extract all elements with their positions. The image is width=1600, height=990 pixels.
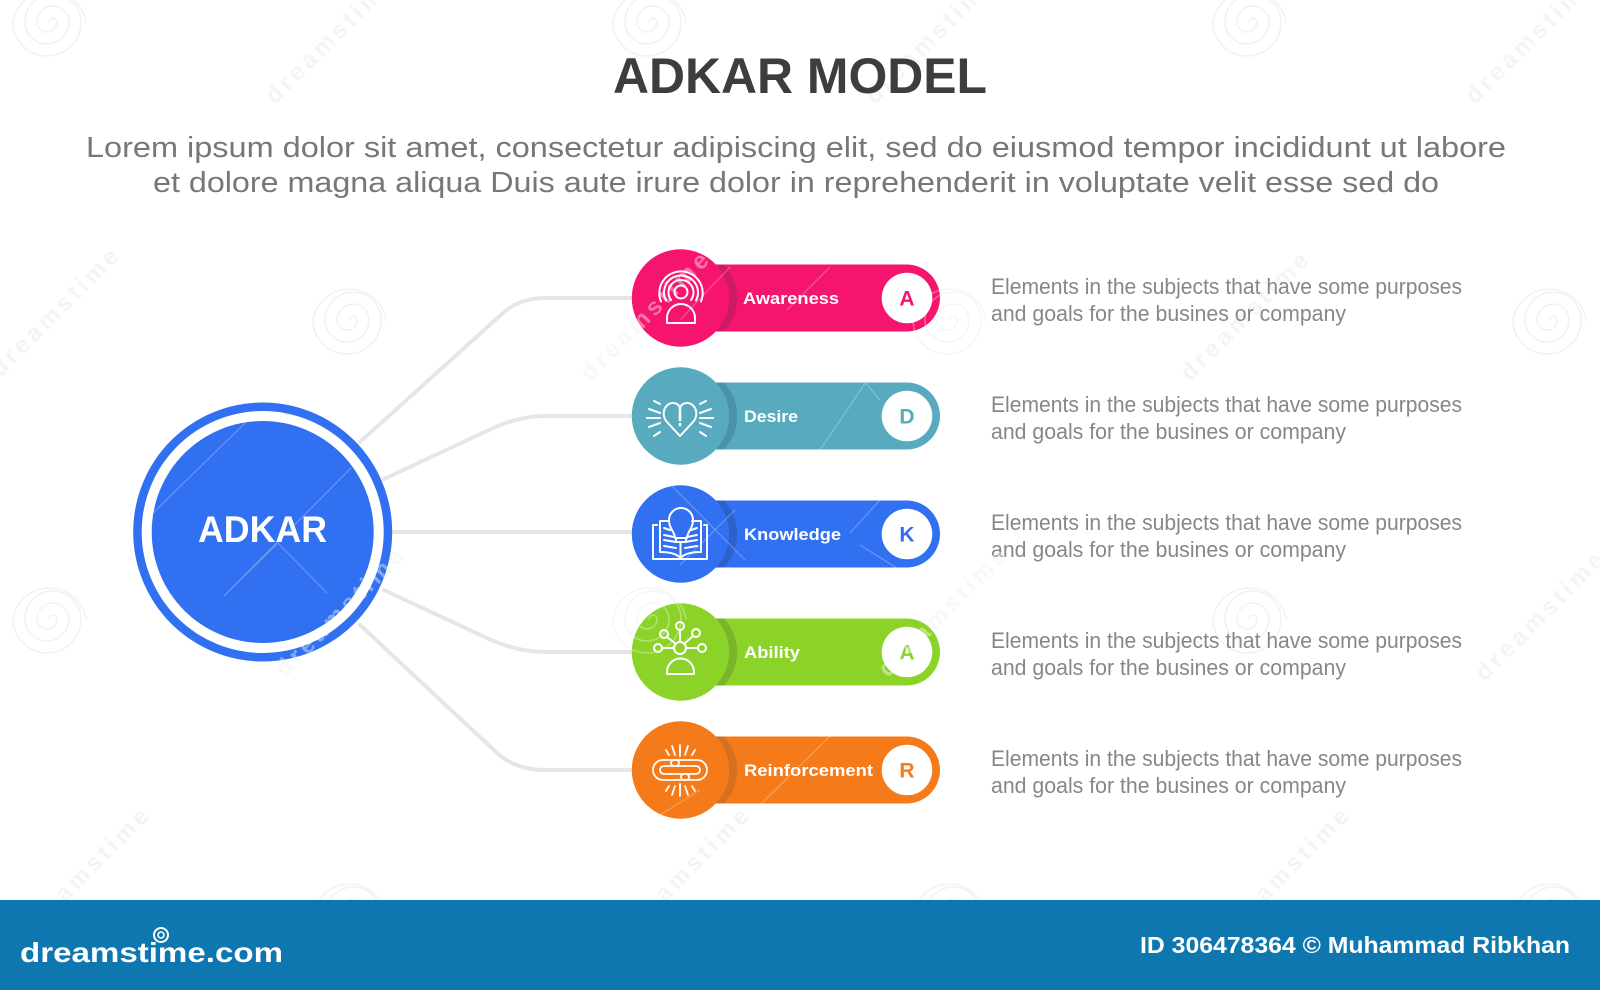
icon: book and bulb	[653, 508, 707, 559]
icon: network person	[654, 622, 706, 674]
description: Desire: and goals for the busines or company	[991, 419, 1346, 444]
watermark layer: dreamstime	[1215, 803, 1354, 942]
watermark layer: dreamstime	[873, 543, 1012, 682]
label: Knowledge: Knowledge	[744, 525, 841, 544]
badge: A	[882, 273, 932, 323]
central label: ADKAR	[198, 509, 327, 550]
watermark layer: dreamstime	[615, 803, 754, 942]
central ADKAR circle	[133, 402, 392, 662]
badge: A	[882, 627, 932, 677]
watermark layer: dreamstime	[270, 543, 409, 682]
icon: awareness	[659, 271, 703, 323]
badge: A: A	[899, 288, 915, 310]
description: Reinforcement: and goals for the busines or company	[991, 773, 1346, 798]
watermark layer: dreamstime	[15, 803, 154, 942]
title: ADKAR MODEL	[613, 48, 987, 104]
badge: R	[882, 745, 932, 795]
badge: K	[882, 509, 932, 559]
label: Ability: Ability	[744, 643, 801, 662]
description: Ability	[991, 628, 1462, 680]
icon: chain link	[653, 745, 707, 796]
watermark overlay on coloured shapes	[153, 247, 1012, 815]
badge: D	[882, 391, 932, 441]
description: Awareness: and goals for the busines or company	[991, 301, 1346, 326]
watermark layer: dreamstime	[1175, 247, 1314, 386]
description: Reinforcement	[991, 746, 1462, 798]
description: Ability: and goals for the busines or company	[991, 655, 1346, 680]
label: Desire: Desire	[744, 407, 798, 426]
footer bar	[0, 900, 1600, 990]
row: Knowledge	[632, 485, 940, 583]
subtitle: Lorem ipsum dolor sit amet, consectetur adipiscing elit, sed do eiusmod tempor incididunt ut labore	[86, 132, 1506, 164]
row: Reinforcement	[632, 721, 940, 819]
badge: R: R	[899, 760, 915, 782]
footer logo	[20, 928, 283, 968]
subtitle: et dolore magna aliqua Duis aute irure dolor in reprehenderit in voluptate velit esse sed do	[153, 167, 1439, 199]
description: Awareness	[991, 274, 1462, 326]
label: Awareness: Awareness	[743, 289, 839, 308]
description: Awareness: Elements in the subjects that have some purposes	[991, 274, 1462, 299]
icon: heart	[647, 401, 713, 436]
connector lines	[360, 298, 635, 770]
description: Knowledge	[991, 510, 1462, 562]
subtitle	[86, 132, 1506, 199]
badge: A: A	[899, 642, 915, 664]
description: Reinforcement: Elements in the subjects that have some purposes	[991, 746, 1462, 771]
label: Reinforcement: Reinforcement	[744, 761, 873, 780]
row: Awareness	[632, 249, 940, 347]
description: Desire: Elements in the subjects that have some purposes	[991, 392, 1462, 417]
footer logo: dreamstime.com	[20, 937, 283, 968]
watermark layer: dreamstime	[575, 247, 714, 386]
watermark overlay on coloured shapes: dreamstime	[873, 543, 1012, 682]
description: Ability: Elements in the subjects that have some purposes	[991, 628, 1462, 653]
description: Knowledge: and goals for the busines or company	[991, 537, 1346, 562]
footer credit: ID 306478364 © Muhammad Ribkhan	[1140, 932, 1570, 958]
watermark overlay on coloured shapes: dreamstime	[575, 247, 714, 386]
description: Desire	[991, 392, 1462, 444]
description: Knowledge: Elements in the subjects that have some purposes	[991, 510, 1462, 535]
row: Ability	[632, 603, 940, 701]
watermark overlay on coloured shapes: dreamstime	[270, 543, 409, 682]
badge: K: K	[899, 524, 915, 546]
badge: D: D	[899, 406, 915, 428]
row: Desire	[632, 367, 940, 465]
